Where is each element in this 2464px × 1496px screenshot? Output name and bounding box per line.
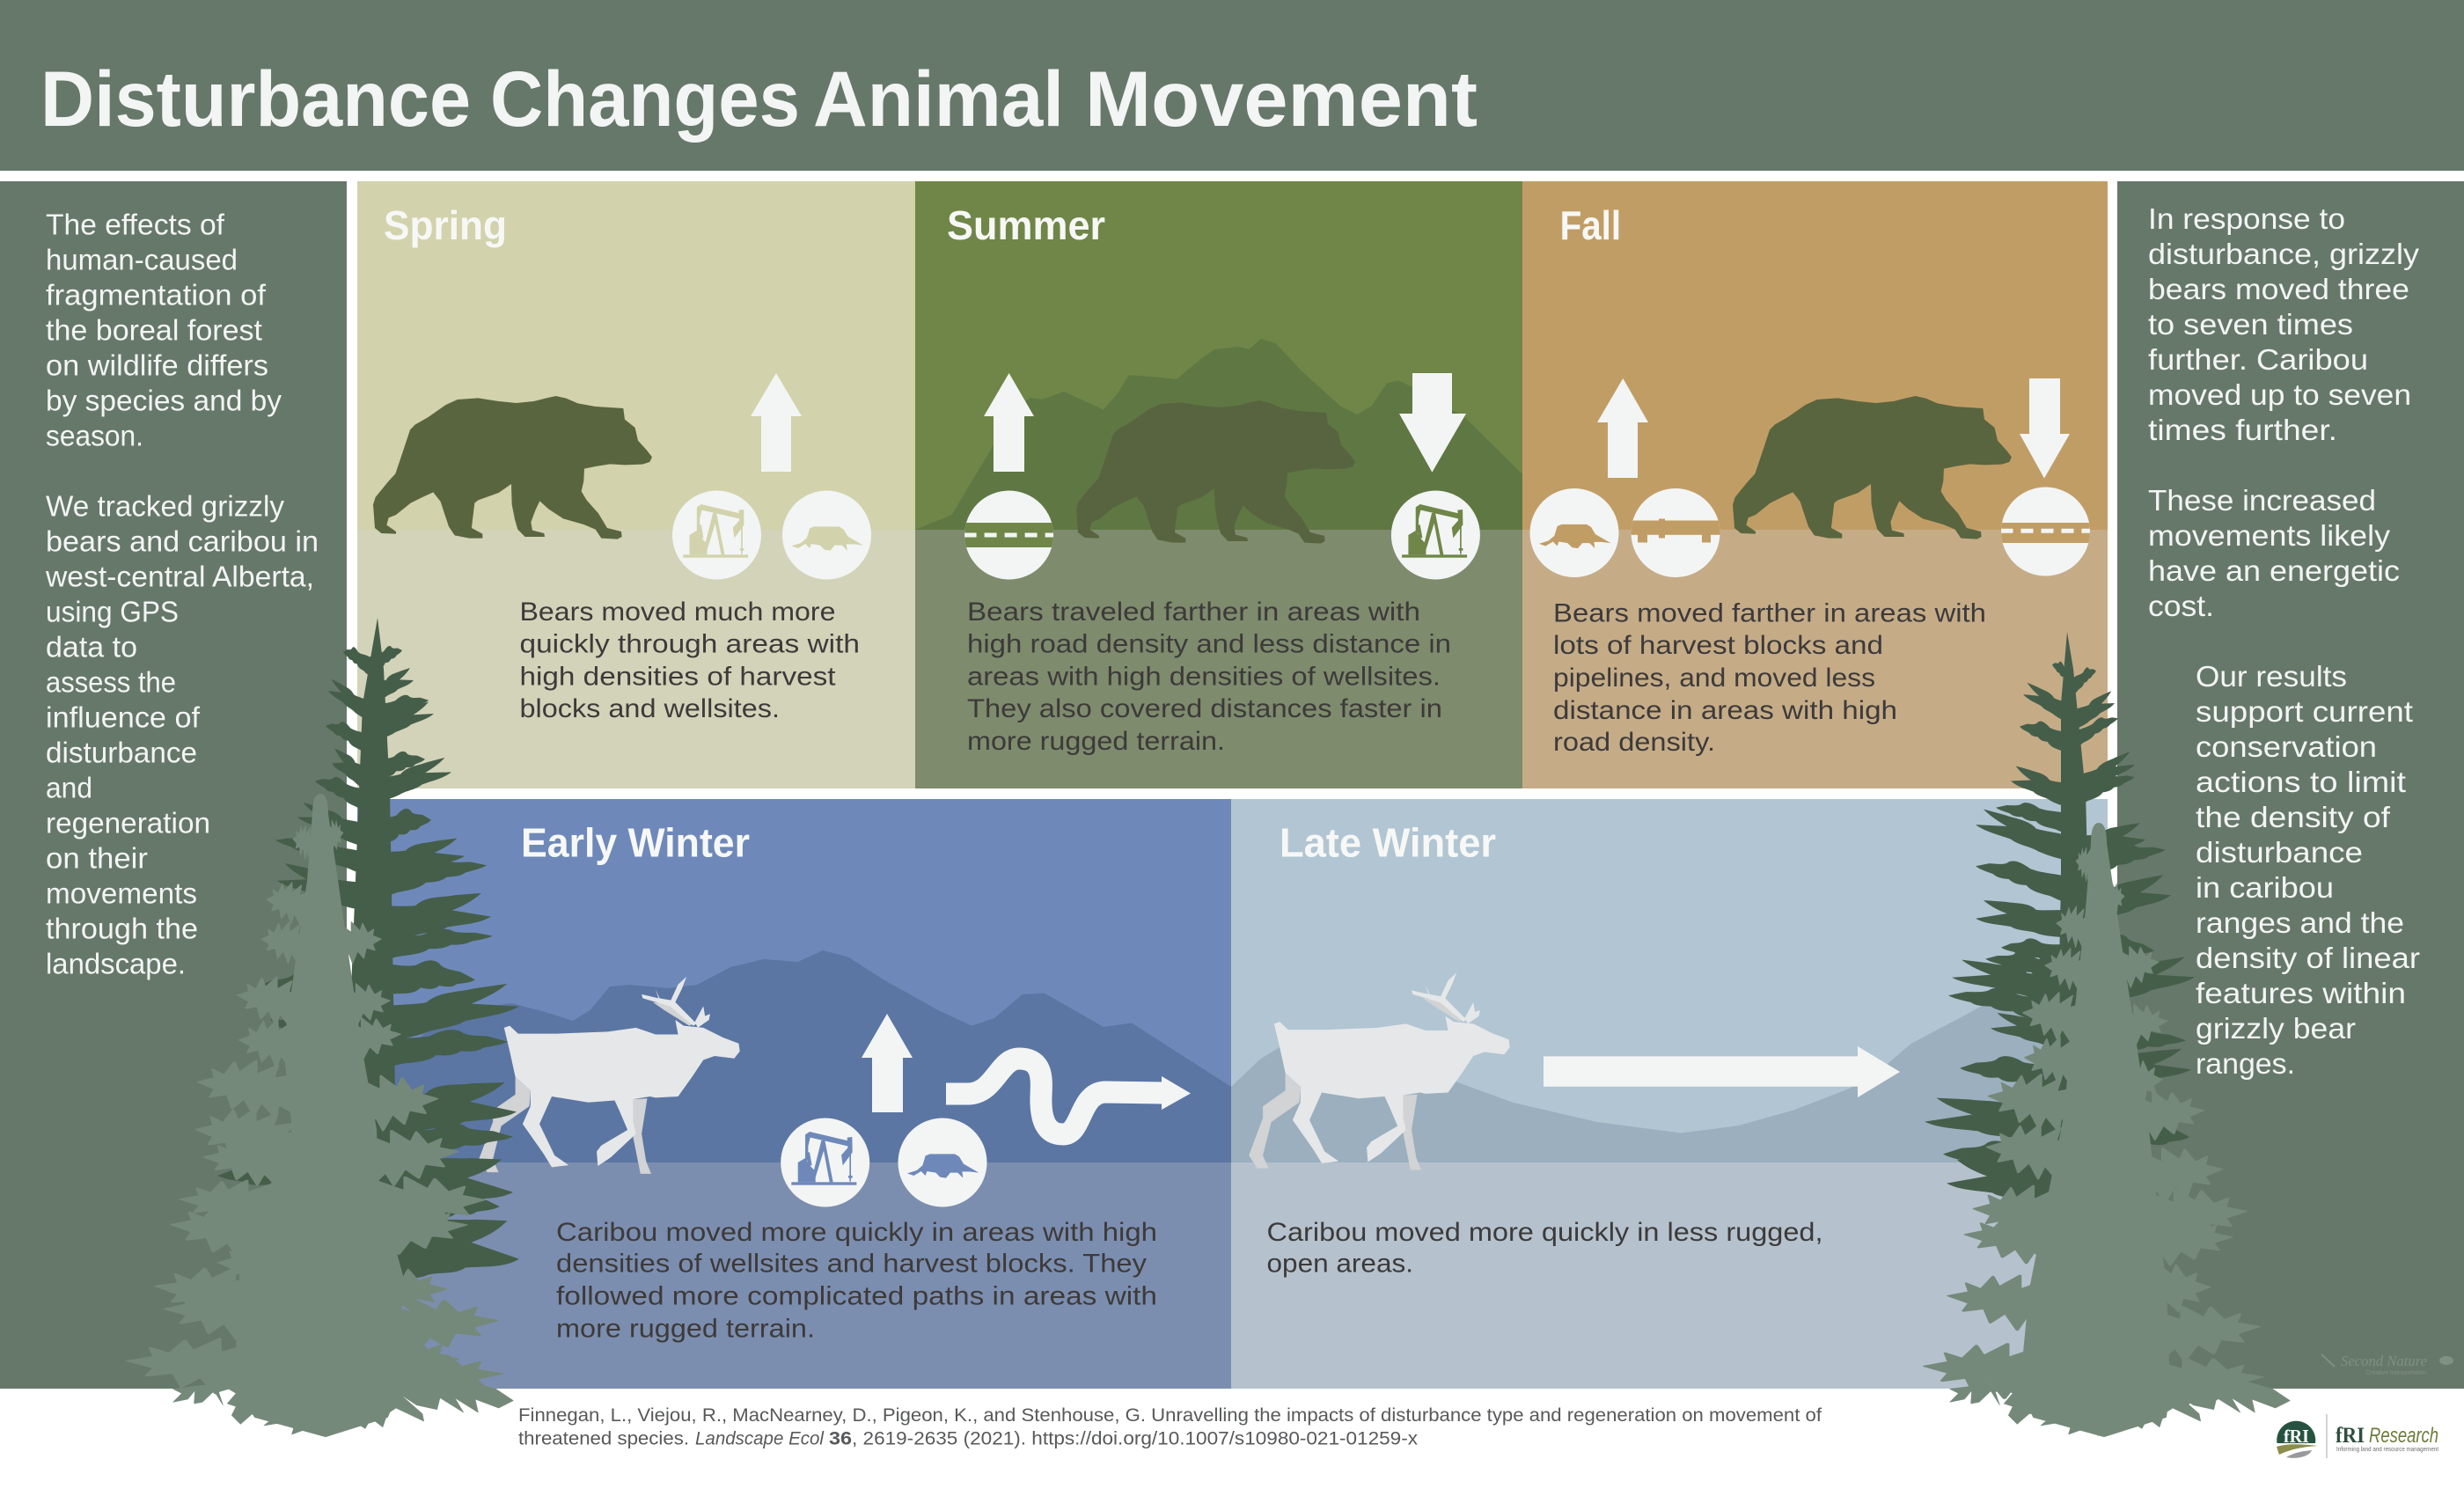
icon: harvest block stump bbox=[1529, 488, 1619, 577]
citation: 36 bbox=[829, 1429, 852, 1449]
tree: light spruce right bbox=[1925, 824, 2290, 1436]
panel: late winter bbox=[1231, 799, 2108, 1389]
icon: road bbox=[964, 491, 1054, 579]
text: left sidebar intro: through the bbox=[46, 912, 198, 945]
heading: spring: Spring bbox=[384, 202, 507, 248]
logo: fRI Research: Research bbox=[2369, 1424, 2438, 1448]
text: fall finding: distance in areas with high bbox=[1553, 696, 1897, 725]
heading: late winter: Late Winter bbox=[1280, 820, 1496, 866]
text: right sidebar conclusions: the density of bbox=[2196, 801, 2391, 833]
text: left sidebar intro bbox=[45, 208, 319, 980]
logo: fRI Research: fRI bbox=[2284, 1426, 2309, 1447]
text: right sidebar response: movements likely bbox=[2148, 519, 2391, 552]
text: spring finding: Bears moved much more bbox=[519, 598, 836, 627]
text: fall finding: Bears moved farther in areas with bbox=[1553, 598, 1986, 628]
arrow: down bbox=[2020, 378, 2070, 479]
icon: wellsite bbox=[781, 1118, 869, 1207]
text: late winter finding bbox=[1267, 1218, 1823, 1278]
watermark: second nature: Creative Interpretation bbox=[2365, 1370, 2426, 1376]
text: fall finding: road density. bbox=[1553, 728, 1715, 757]
panel: right sidebar background bbox=[2117, 181, 2464, 1389]
panel: left sidebar background bbox=[0, 181, 347, 1389]
text: right sidebar response: moved up to seven bbox=[2148, 378, 2411, 411]
text: right sidebar response: In response to bbox=[2148, 202, 2345, 235]
text: right sidebar response: These increased bbox=[2148, 484, 2376, 517]
text: summer finding: more rugged terrain. bbox=[967, 727, 1225, 756]
text: left sidebar intro: landscape. bbox=[46, 947, 186, 980]
icon: wellsite bbox=[672, 491, 761, 579]
text: left sidebar intro: data to bbox=[46, 630, 137, 664]
text: left sidebar intro: fragmentation of bbox=[46, 278, 267, 312]
citation: threatened species. bbox=[518, 1429, 689, 1449]
text: fall finding: lots of harvest blocks and bbox=[1553, 631, 1883, 660]
title: Animal bbox=[813, 55, 1064, 143]
text: spring finding bbox=[519, 598, 860, 723]
tree: dark spruce right bbox=[1925, 632, 2195, 1232]
arrow: up bbox=[751, 373, 802, 472]
text: summer finding: They also covered distances faster in bbox=[967, 694, 1442, 723]
heading: early winter: Early Winter bbox=[521, 820, 750, 866]
text: left sidebar intro: assess the bbox=[46, 665, 176, 699]
bear silhouette bbox=[373, 396, 652, 539]
arrow: up bbox=[1597, 378, 1648, 478]
text: late winter finding: Caribou moved more quickly in less rugged, bbox=[1267, 1218, 1823, 1247]
watermark: second nature: Second Nature bbox=[2341, 1353, 2427, 1369]
citation: , 2619-2635 (2021). https://doi.org/10.1007/s10980-021-01259-x bbox=[852, 1429, 1419, 1449]
panel: fall bbox=[1522, 181, 2108, 788]
arrow: up bbox=[862, 1014, 913, 1112]
heading: summer: Summer bbox=[947, 202, 1105, 248]
icon: pipeline bbox=[1631, 488, 1720, 577]
text: right sidebar conclusions: support current bbox=[2196, 695, 2413, 728]
logo: fRI Research: fRI bbox=[2336, 1424, 2365, 1448]
text: left sidebar intro: by species and by bbox=[46, 384, 282, 417]
icon: harvest block stump bbox=[782, 491, 871, 579]
mountains: early winter bbox=[357, 950, 1231, 1162]
text: early winter finding: densities of wellsites and harvest blocks. They bbox=[556, 1250, 1147, 1278]
arrow: right bbox=[1544, 1046, 1900, 1097]
citation bbox=[518, 1405, 1822, 1449]
title banner bbox=[0, 0, 2464, 171]
text: left sidebar intro: west-central Alberta, bbox=[45, 560, 314, 593]
text: right sidebar conclusions: ranges. bbox=[2196, 1047, 2295, 1080]
text: left sidebar intro: human-caused bbox=[46, 243, 238, 276]
tree: light spruce left bbox=[128, 795, 513, 1436]
text: right sidebar conclusions: ranges and the bbox=[2196, 906, 2404, 939]
title: Disturbance bbox=[40, 55, 471, 143]
text: fall finding: pipelines, and moved less bbox=[1553, 664, 1875, 693]
heading: fall: Fall bbox=[1560, 202, 1621, 248]
panel: early winter bbox=[357, 799, 1231, 1389]
text: right sidebar conclusions: in caribou bbox=[2196, 871, 2334, 904]
text: right sidebar response: to seven times bbox=[2148, 308, 2353, 341]
text: left sidebar intro: season. bbox=[46, 419, 143, 452]
logo: fRI Research bbox=[2277, 1414, 2439, 1458]
mountains: late winter bbox=[1231, 1003, 2108, 1162]
panel: summer bbox=[915, 181, 1522, 788]
citation: Finnegan, L., Viejou, R., MacNearney, D., Pigeon, K., and Stenhouse, G. Unravelling the impacts of disturbance type and regeneration on movement of bbox=[518, 1405, 1822, 1426]
text: right sidebar response bbox=[2148, 202, 2420, 622]
text: right sidebar response: bears moved three bbox=[2148, 273, 2409, 305]
mountains: summer bbox=[915, 339, 1522, 530]
caribou silhouette bbox=[1249, 972, 1510, 1170]
text: summer finding: Bears traveled farther in areas with bbox=[967, 598, 1420, 627]
text: right sidebar conclusions: disturbance bbox=[2196, 836, 2363, 869]
panel: spring bbox=[357, 181, 915, 788]
text: right sidebar conclusions: actions to limit bbox=[2196, 766, 2406, 798]
text: early winter finding bbox=[556, 1218, 1157, 1344]
text: early winter finding: more rugged terrain. bbox=[556, 1315, 815, 1344]
text: spring finding: blocks and wellsites. bbox=[519, 694, 780, 723]
text: left sidebar intro: the boreal forest bbox=[46, 313, 262, 347]
text: spring finding: quickly through areas with bbox=[519, 630, 860, 659]
text: right sidebar response: times further. bbox=[2148, 414, 2337, 446]
text: left sidebar intro: and bbox=[46, 771, 92, 804]
title bbox=[40, 55, 1478, 143]
icon: harvest block stump bbox=[898, 1118, 987, 1207]
text: left sidebar intro: disturbance bbox=[46, 736, 197, 769]
arrow: down bbox=[1399, 373, 1466, 473]
title: Changes bbox=[490, 55, 800, 143]
text: right sidebar response: disturbance, grizzly bbox=[2148, 238, 2420, 270]
text: right sidebar response: have an energetic bbox=[2148, 554, 2400, 587]
logo: fRI Research: Informing land and resource management bbox=[2336, 1445, 2439, 1453]
text: right sidebar response: cost. bbox=[2148, 590, 2214, 622]
text: left sidebar intro: The effects of bbox=[46, 208, 225, 241]
text: summer finding bbox=[967, 598, 1451, 756]
text: late winter finding: open areas. bbox=[1267, 1250, 1413, 1278]
tree: dark spruce left bbox=[217, 618, 519, 1302]
arrow: winding path bbox=[946, 1059, 1191, 1134]
text: right sidebar response: further. Caribou bbox=[2148, 343, 2368, 376]
title: Movement bbox=[1085, 55, 1478, 143]
text: left sidebar intro: on wildlife differs bbox=[46, 348, 268, 382]
caribou silhouette bbox=[479, 977, 740, 1174]
bear silhouette bbox=[1733, 396, 2012, 539]
icon: wellsite bbox=[1391, 491, 1480, 579]
text: right sidebar conclusions: density of linear bbox=[2196, 942, 2420, 974]
bear silhouette bbox=[1076, 400, 1355, 544]
text: spring finding: high densities of harvest bbox=[519, 662, 836, 691]
text: right sidebar conclusions: Our results bbox=[2196, 660, 2347, 693]
text: left sidebar intro: bears and caribou in bbox=[46, 524, 319, 558]
text: left sidebar intro: movements bbox=[46, 876, 197, 910]
text: summer finding: high road density and less distance in bbox=[967, 630, 1451, 659]
text: right sidebar conclusions: conservation bbox=[2196, 730, 2377, 763]
text: right sidebar conclusions: grizzly bear bbox=[2196, 1012, 2356, 1045]
text: fall finding bbox=[1553, 598, 1986, 757]
text: left sidebar intro: We tracked grizzly bbox=[46, 489, 284, 523]
text: left sidebar intro: regeneration bbox=[46, 806, 210, 840]
text: early winter finding: Caribou moved more quickly in areas with high bbox=[556, 1218, 1157, 1247]
text: early winter finding: followed more complicated paths in areas with bbox=[556, 1282, 1157, 1311]
icon: road bbox=[2001, 488, 2091, 576]
text: right sidebar conclusions bbox=[2196, 660, 2420, 1080]
text: summer finding: areas with high densities of wellsites. bbox=[967, 662, 1441, 691]
watermark: second nature bbox=[2321, 1353, 2453, 1376]
text: left sidebar intro: influence of bbox=[46, 700, 201, 734]
text: left sidebar intro: using GPS bbox=[46, 595, 179, 628]
text: left sidebar intro: on their bbox=[46, 841, 148, 875]
citation: Landscape Ecol bbox=[695, 1429, 825, 1449]
text: right sidebar conclusions: features within bbox=[2196, 977, 2406, 1009]
arrow: up bbox=[984, 373, 1034, 472]
